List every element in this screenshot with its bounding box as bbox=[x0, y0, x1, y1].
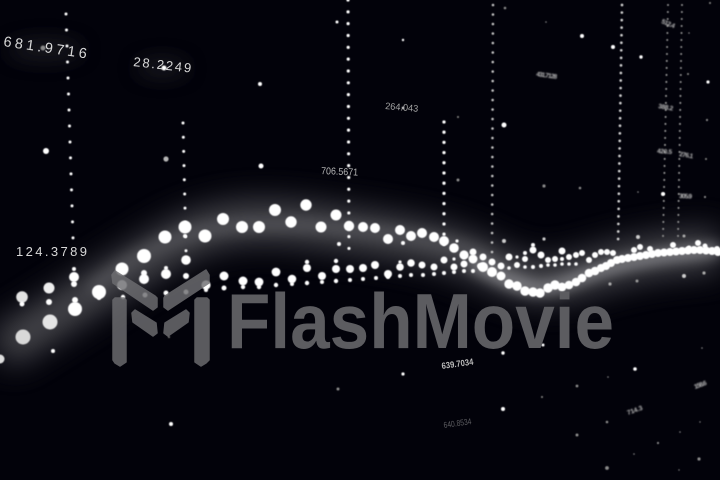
middle series of medium dots bbox=[16, 240, 720, 303]
number labels, sharp bbox=[2, 34, 474, 430]
label: 706.5671: 706.5671 bbox=[321, 166, 359, 179]
number labels, out of focus bbox=[536, 18, 708, 417]
dotted vertical columns bbox=[66, 0, 682, 258]
label: mid right 4: 305.9 bbox=[679, 193, 693, 200]
label: 431.7128: 431.7128 bbox=[536, 71, 558, 81]
label: 681.9716: 681.9716 bbox=[2, 34, 88, 62]
label: 28.2249: 28.2249 bbox=[133, 54, 192, 76]
lower series of small dots bbox=[20, 234, 706, 306]
label: 639.7034: 639.7034 bbox=[441, 357, 474, 371]
label: lower right 2: 158.6 bbox=[693, 380, 708, 391]
label: mid right 3: 276.1 bbox=[679, 151, 694, 160]
label: 124.3789: 124.3789 bbox=[16, 244, 87, 259]
label: mid right 2: 420.5 bbox=[657, 148, 673, 156]
glow behind the wave bbox=[0, 40, 720, 350]
logo wordmark: FlashMovie bbox=[227, 277, 614, 365]
label: mid right 1: 388.2 bbox=[658, 103, 674, 113]
logo mark bbox=[112, 270, 209, 366]
label: 640.8534: 640.8534 bbox=[443, 416, 472, 430]
label: lower right 1: 714.3 bbox=[626, 405, 644, 417]
label: 264.043: 264.043 bbox=[385, 101, 419, 115]
upper series of large dots bbox=[0, 199, 720, 364]
label: upper right: 512.4 bbox=[660, 18, 676, 30]
watermark logo bbox=[112, 270, 614, 366]
